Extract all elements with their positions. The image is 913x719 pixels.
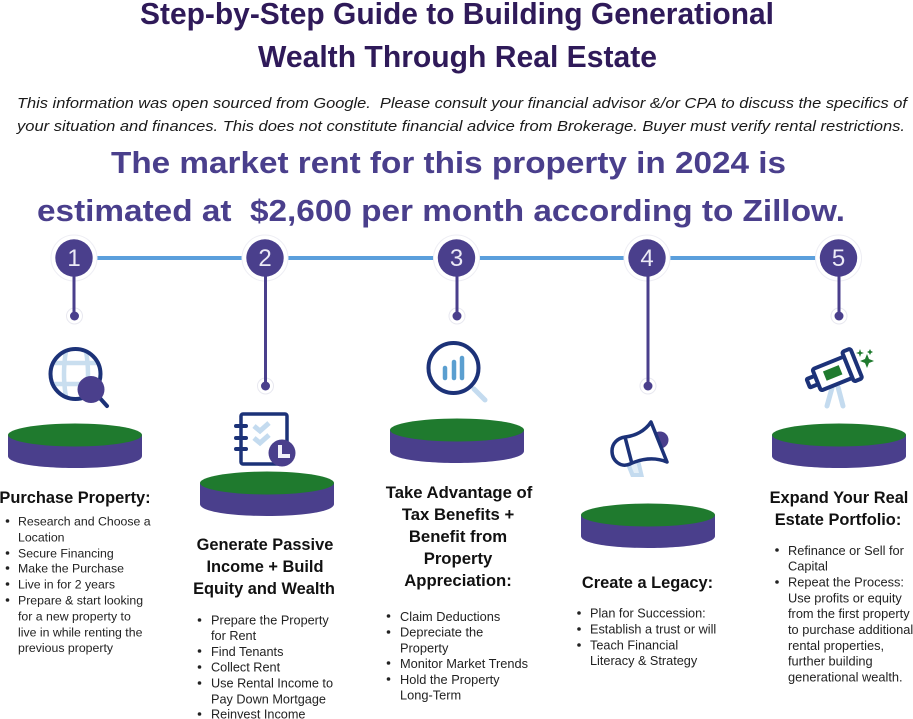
icon: chart magnifier xyxy=(428,343,485,400)
step 3 heading: Benefit from xyxy=(409,527,507,546)
step 5 list: to purchase additional xyxy=(788,622,913,637)
step 3 heading: Take Advantage of xyxy=(386,483,533,502)
step 5 list: Capital xyxy=(788,558,828,574)
step 3 list: Monitor Market Trends xyxy=(400,656,528,671)
step 5 heading xyxy=(770,489,908,529)
podium 4 xyxy=(581,504,715,548)
step 3 list: Property xyxy=(400,640,449,656)
step 5 list: from the first property xyxy=(788,606,910,621)
icon: megaphone xyxy=(612,422,668,477)
step 5 list: Use profits or equity xyxy=(788,590,902,606)
step 2 heading: Income + Build xyxy=(206,558,324,576)
step 2 heading: Equity and Wealth xyxy=(193,580,335,598)
step 1 list: Location xyxy=(18,530,65,544)
title xyxy=(140,0,774,74)
step 5 list xyxy=(775,543,913,684)
step 1 list: Prepare & start looking xyxy=(18,594,143,608)
step 5 heading: Expand Your Real xyxy=(770,489,908,507)
step 5 marker: 5 xyxy=(832,245,845,272)
step 2 list: for Rent xyxy=(211,629,257,643)
step 3 marker xyxy=(434,235,480,324)
icon: telescope xyxy=(802,349,874,406)
step 5 marker xyxy=(816,235,862,324)
step 1 list: previous property xyxy=(18,641,114,655)
disclaimer text: your situation and finances. This does not constitute financial advice from Brokerage. Buyer must verify rental restrictions. xyxy=(16,118,905,135)
step 2 marker xyxy=(242,235,288,394)
podium 5 xyxy=(772,424,906,468)
step 2 list: Prepare the Property xyxy=(211,614,329,628)
step 1 list: for a new property to xyxy=(18,610,131,624)
icon: checklist notebook xyxy=(236,414,296,466)
step 2 heading xyxy=(193,536,335,598)
step 3 list: Long-Term xyxy=(400,688,461,702)
podium 1 xyxy=(8,424,142,468)
step 3 heading xyxy=(386,483,533,590)
market rent statement xyxy=(37,145,845,228)
step 3 list: Claim Deductions xyxy=(400,609,500,624)
step 5 list: generational wealth. xyxy=(788,670,903,684)
step 2 list: Pay Down Mortgage xyxy=(211,692,326,706)
step 3 heading: Appreciation: xyxy=(404,571,512,590)
step 1 heading: Purchase Property: xyxy=(0,489,151,507)
step 4 marker: 4 xyxy=(640,245,654,272)
market rent statement: estimated at $2,600 per month according to Zillow. xyxy=(37,193,845,228)
step 1 list: Make the Purchase xyxy=(18,562,124,576)
step 2 list: Find Tenants xyxy=(211,645,283,659)
step 4 list: Teach Financial xyxy=(590,638,678,652)
step 3 heading: Tax Benefits + xyxy=(402,505,514,524)
step 4 list: Plan for Succession: xyxy=(590,606,706,620)
step 4 marker xyxy=(624,235,670,394)
step 1 list: Research and Choose a xyxy=(18,514,151,528)
step 4 list xyxy=(577,606,716,668)
step 1 list xyxy=(6,514,151,655)
step 2 list: Use Rental Income to xyxy=(211,676,333,690)
title: Wealth Through Real Estate xyxy=(258,39,657,74)
step 1 list: Secure Financing xyxy=(18,546,114,560)
step 3 marker: 3 xyxy=(450,245,463,272)
step 1 list: Live in for 2 years xyxy=(18,578,115,592)
step 5 list: Refinance or Sell for xyxy=(788,543,905,558)
step 3 heading: Property xyxy=(424,549,493,568)
step 5 list: rental properties, xyxy=(788,638,884,653)
step 4 heading: Create a Legacy: xyxy=(582,574,713,592)
podium 3 xyxy=(390,418,524,463)
step 1 list: live in while renting the xyxy=(18,626,143,640)
icon: globe search xyxy=(50,349,107,406)
disclaimer text: This information was open sourced from Google. Please consult your financial advisor &/or CPA to discuss the specifics of xyxy=(17,95,909,112)
step 1 marker xyxy=(51,235,97,324)
disclaimer text xyxy=(16,95,909,135)
market rent statement: The market rent for this property in 2024 is xyxy=(111,145,786,180)
step 5 heading: Estate Portfolio: xyxy=(775,511,901,529)
step 2 list xyxy=(198,614,333,719)
step 3 list: Hold the Property xyxy=(400,672,500,687)
step 4 list: Literacy & Strategy xyxy=(590,654,698,668)
step 5 list: further building xyxy=(788,654,873,668)
step 2 heading: Generate Passive xyxy=(197,536,333,554)
step 5 list: Repeat the Process: xyxy=(788,574,904,590)
step 3 list xyxy=(387,609,528,702)
step 1 marker: 1 xyxy=(67,245,81,272)
step 4 list: Establish a trust or will xyxy=(590,622,716,636)
timeline connector xyxy=(96,256,840,260)
step 3 list: Depreciate the xyxy=(400,624,483,640)
step 2 list: Collect Rent xyxy=(211,660,281,674)
step 2 marker: 2 xyxy=(258,245,272,272)
podium 2 xyxy=(200,472,334,516)
